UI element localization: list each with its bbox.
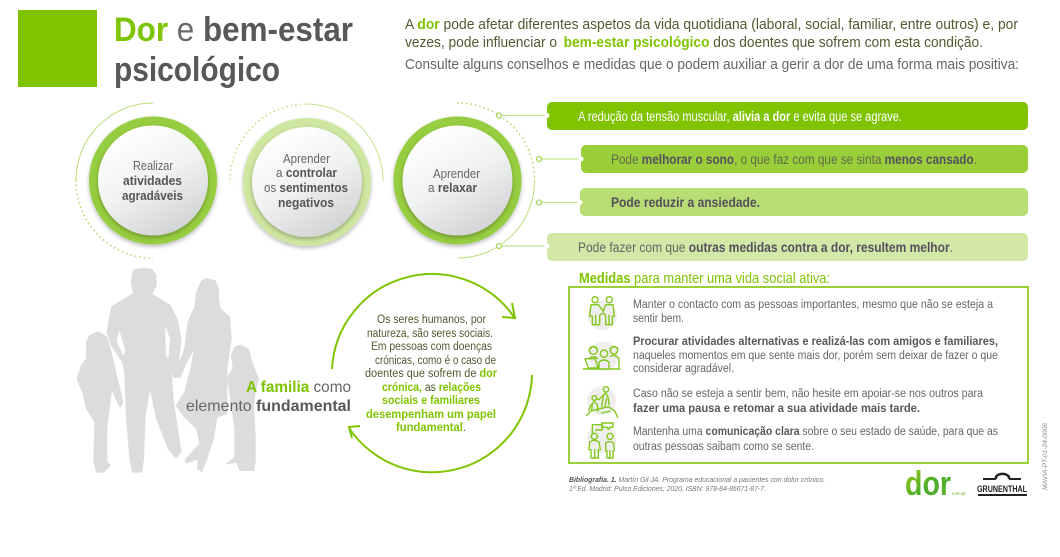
circle: aprender a relaxar <box>394 103 535 258</box>
family text: sociais e familiares <box>382 395 480 407</box>
circle: aprender a controlar os sentimentos negativos: Aprender <box>283 151 331 166</box>
left child <box>77 332 123 472</box>
medida 4 text: Mantenha uma comunicação clara sobre o seu estado de saúde, para que as <box>633 426 998 438</box>
heading: a familia <box>186 379 351 415</box>
logo: grunenthal <box>977 474 1027 496</box>
bibliography <box>569 477 825 493</box>
family text: fundamental. <box>396 422 466 434</box>
icon: friends with laptop <box>583 342 620 371</box>
family text: Em pessoas com doenças <box>371 341 492 353</box>
circle: aprender a controlar os sentimentos negativos: negativos <box>278 195 334 210</box>
title: psicológico <box>114 51 280 89</box>
bibliography: Bibliografia. 1. Martín Gil JA. Programa educacional a pacientes con dolor crónico. <box>569 477 825 484</box>
medida 2 text: Procurar atividades alternativas e realizá-las com amigos e familiares, <box>633 336 998 348</box>
medida 2 text: considerar agradável. <box>633 363 734 375</box>
circle: realizar atividades agradáveis: atividades <box>123 173 182 188</box>
family text: crónica, as relações <box>382 382 481 394</box>
title <box>114 11 353 89</box>
bar: reduzir a ansiedade: Pode reduzir a ansiedade. <box>611 195 760 210</box>
heading: medidas: Medidas para manter uma vida social ativa: <box>579 270 830 287</box>
connector lines <box>496 113 581 248</box>
title: Dor e bem-estar <box>114 11 353 49</box>
family text: crónicas, como é o caso de <box>375 355 496 367</box>
medida 4 text <box>633 426 998 453</box>
icon: people helping on a hill <box>587 386 618 417</box>
medida 1 text <box>633 299 994 325</box>
green square <box>18 10 97 87</box>
intro text: A dor pode afetar diferentes aspetos da vida quotidiana (laboral, social, familiar, entre outros) e, por <box>405 16 1018 33</box>
logo: grunenthal: GRUNENTHAL <box>977 484 1027 495</box>
circle: realizar atividades agradáveis: Realizar <box>133 158 174 173</box>
heading: a familia: elemento fundamental <box>186 398 351 415</box>
medida 3 text: Caso não se esteja a sentir bem, não hesite em apoiar-se nos outros para <box>633 388 984 400</box>
circle: aprender a controlar os sentimentos negativos: os sentimentos <box>264 180 348 195</box>
bar: melhorar o sono: Pode melhorar o sono, o que faz com que se sinta menos cansado. <box>611 152 977 167</box>
circle: aprender a controlar os sentimentos negativos: a controlar <box>276 165 337 180</box>
medida 2 text: naqueles momentos em que sente mais dor, porém sem deixar de fazer o que <box>633 350 998 362</box>
icon: two people talking <box>587 423 616 458</box>
heading: a familia: A familia como <box>246 379 351 396</box>
circle: realizar atividades agradáveis: agradáveis <box>122 188 183 203</box>
circle: aprender a relaxar: Aprender <box>433 166 481 181</box>
circle: aprender a controlar os sentimentos negativos <box>230 104 383 246</box>
medida 3 text: fazer uma pausa e retomar a sua atividade mais tarde. <box>633 403 920 415</box>
woman <box>175 279 231 471</box>
intro text <box>405 16 1019 73</box>
bar: alivia a dor: A redução da tensão muscular, alivia a dor e evita que se agrave. <box>578 109 902 124</box>
family text <box>365 314 497 434</box>
bar: alivia a dor <box>544 102 1028 130</box>
medida 1 text: Manter o contacto com as pessoas importantes, mesmo que não se esteja a <box>633 299 994 311</box>
bar: outras medidas: Pode fazer com que outras medidas contra a dor, resultem melhor. <box>578 240 953 255</box>
intro text: vezes, pode influenciar o bem-estar psicológico dos doentes que sofrem com esta condição. <box>405 34 983 51</box>
icon: two people holding hands <box>588 297 617 330</box>
right child <box>227 345 258 470</box>
bibliography: 1ª Ed. Madrid: Pulso Ediciones; 2020. ISBN: 978-84-86671-87-7. <box>569 486 766 493</box>
family silhouette <box>77 269 258 472</box>
medida 2 text <box>633 336 998 375</box>
circular arrows <box>332 274 532 472</box>
family text: doentes que sofrem de dor <box>365 368 497 380</box>
bar: reduzir a ansiedade <box>578 188 1028 216</box>
document code: MAVIA-PT-01-24-0006 <box>1042 423 1049 490</box>
circle: realizar atividades agradáveis <box>76 103 217 258</box>
man <box>107 269 181 472</box>
panel: medidas <box>569 287 1028 463</box>
family text: desempenham um papel <box>366 409 496 421</box>
family text: natureza, são seres sociais. <box>367 328 493 340</box>
intro text: Consulte alguns conselhos e medidas que o podem auxiliar a gerir a dor de uma forma mais positiva: <box>405 56 1019 73</box>
bar: outras medidas <box>544 233 1028 261</box>
logo: dor.com.pt: com.pt <box>952 491 966 496</box>
family text: Os seres humanos, por <box>377 314 486 326</box>
bar: melhorar o sono <box>578 145 1028 173</box>
logo: dor.com.pt: dor <box>905 465 951 503</box>
medida 1 text: sentir bem. <box>633 313 684 325</box>
circle: aprender a relaxar: a relaxar <box>428 180 477 195</box>
medida 4 text: outras pessoas saibam como se sente. <box>633 441 814 453</box>
medida 3 text <box>633 388 984 415</box>
